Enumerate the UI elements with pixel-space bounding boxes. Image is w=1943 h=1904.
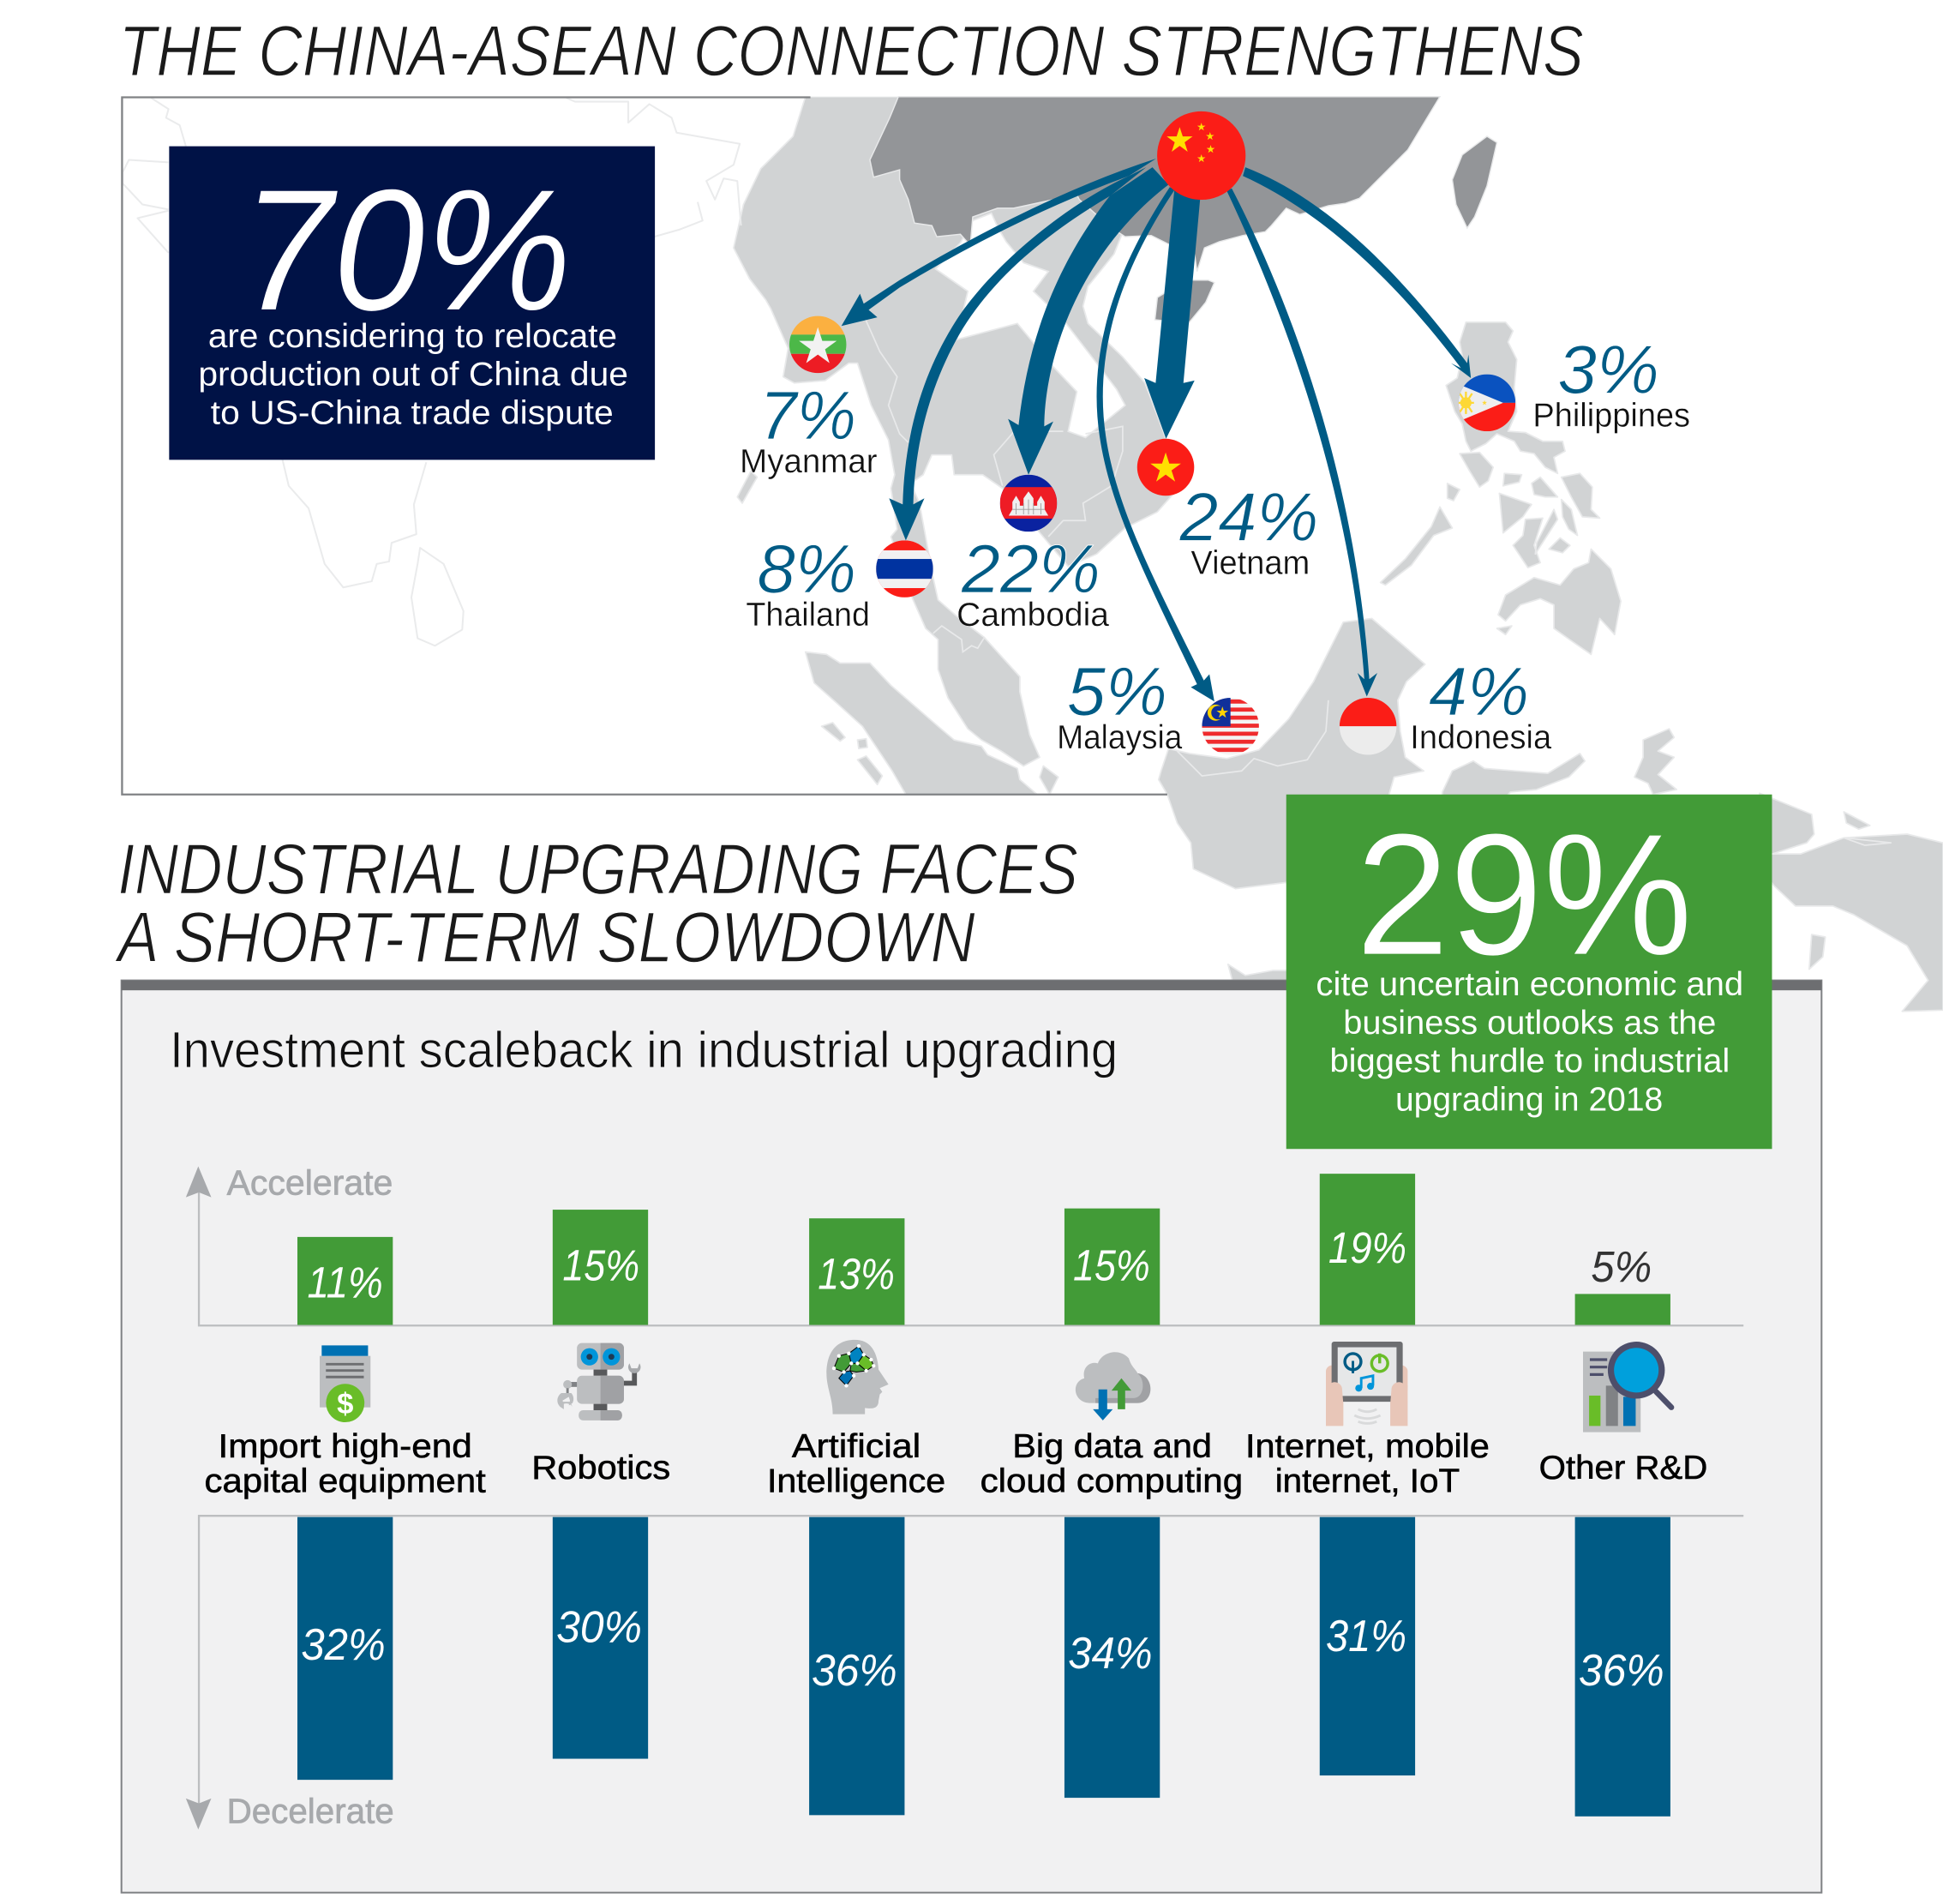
country labels: 5% bbox=[1067, 653, 1167, 730]
bars: decelerate bbox=[297, 1517, 1670, 1817]
heading: industrial upgrading bbox=[114, 828, 1078, 977]
callout: 29 percent: upgrading in 2018 bbox=[1395, 1081, 1663, 1118]
flag: Philippines bbox=[1459, 374, 1515, 432]
country labels: Myanmar bbox=[740, 443, 878, 480]
axis: accelerate bbox=[186, 1163, 1743, 1325]
country labels: Indonesia bbox=[1410, 719, 1551, 756]
bars: accelerate: 13% bbox=[818, 1250, 895, 1299]
category labels: cloud computing bbox=[980, 1463, 1243, 1500]
frame of map panel bbox=[122, 97, 1167, 795]
panel: investment scaleback bbox=[122, 981, 1821, 1893]
country labels: 24% bbox=[1178, 478, 1318, 555]
callout: 70 percent: 70% bbox=[241, 153, 572, 346]
bars: decelerate: 34% bbox=[1068, 1629, 1153, 1679]
country labels: 4% bbox=[1429, 653, 1529, 730]
bars: accelerate: 5% bbox=[1591, 1242, 1652, 1291]
country labels: 3% bbox=[1557, 331, 1659, 407]
bars: accelerate: 11% bbox=[308, 1258, 383, 1307]
arrows from China bbox=[842, 159, 1471, 701]
category labels: Artificial bbox=[792, 1428, 921, 1465]
callout: 70 percent: to US-China trade dispute bbox=[211, 394, 614, 431]
category labels: capital equipment bbox=[205, 1463, 486, 1500]
country labels: 7% bbox=[759, 377, 856, 453]
icon: import equipment: $ bbox=[337, 1388, 353, 1420]
country labels: 22% bbox=[961, 531, 1100, 607]
country labels: Vietnam bbox=[1190, 544, 1310, 581]
country labels: Thailand bbox=[746, 597, 870, 634]
icon: tablet bbox=[1326, 1342, 1407, 1426]
icon: robot bbox=[557, 1343, 640, 1420]
flag: Indonesia bbox=[1340, 698, 1396, 754]
callout: 29 percent: 29% bbox=[1356, 797, 1693, 991]
bars: decelerate: 32% bbox=[301, 1620, 386, 1670]
bars: accelerate bbox=[297, 1174, 1670, 1325]
chart heading: Investment scaleback in industrial upgrading bbox=[170, 1021, 1118, 1078]
callout: 29 percent bbox=[1286, 795, 1772, 1149]
axis: decelerate bbox=[186, 1516, 1743, 1831]
country labels: 8% bbox=[757, 531, 856, 607]
bars: decelerate: 36% bbox=[812, 1646, 897, 1696]
bars: accelerate: 19% bbox=[1328, 1223, 1406, 1272]
bars: decelerate: 30% bbox=[556, 1603, 642, 1653]
flag: Thailand bbox=[876, 540, 933, 598]
axis: accelerate: Accelerate bbox=[227, 1163, 393, 1203]
country labels: Philippines bbox=[1532, 397, 1690, 434]
callout: 70 percent bbox=[169, 147, 655, 459]
bars: accelerate: 15% bbox=[1073, 1240, 1150, 1289]
bars: decelerate: 36% bbox=[1579, 1646, 1664, 1696]
category labels: Internet, mobile bbox=[1245, 1428, 1490, 1465]
flag: Cambodia bbox=[1000, 475, 1057, 532]
category labels bbox=[205, 1428, 1707, 1500]
flag: Malaysia bbox=[1202, 698, 1259, 754]
flag: China bbox=[1157, 111, 1245, 200]
category labels: internet, IoT bbox=[1275, 1463, 1460, 1500]
map of South-East Asia bbox=[123, 97, 1943, 1012]
country labels bbox=[740, 331, 1690, 756]
category labels: Other R&D bbox=[1539, 1450, 1707, 1487]
country labels: Malaysia bbox=[1057, 719, 1183, 756]
callout: 29 percent: cite uncertain economic and bbox=[1316, 966, 1743, 1003]
heading: industrial upgrading: INDUSTRIAL UPGRADING FACES bbox=[117, 828, 1078, 909]
heading: industrial upgrading: A SHORT-TERM SLOWDOWN bbox=[114, 897, 975, 977]
category labels: Import high-end bbox=[218, 1428, 472, 1465]
icon: cloud bbox=[1076, 1352, 1150, 1420]
callout: 29 percent: business outlooks as the bbox=[1343, 1005, 1716, 1042]
axis: decelerate: Decelerate bbox=[227, 1792, 394, 1831]
country labels: Cambodia bbox=[957, 597, 1109, 634]
flag: Vietnam bbox=[1137, 439, 1194, 496]
category labels: Intelligence bbox=[767, 1463, 945, 1500]
icon: AI head bbox=[826, 1340, 889, 1414]
category labels: Robotics bbox=[531, 1450, 670, 1487]
callout: 70 percent: are considering to relocate bbox=[208, 318, 617, 355]
flag: Myanmar bbox=[789, 315, 846, 374]
callout: 29 percent: biggest hurdle to industrial bbox=[1329, 1043, 1730, 1080]
bars: decelerate: 31% bbox=[1326, 1612, 1406, 1661]
category labels: Big data and bbox=[1012, 1428, 1212, 1465]
icon: R&D magnifier bbox=[1583, 1342, 1671, 1433]
bars: accelerate: 15% bbox=[562, 1240, 639, 1289]
icon: import equipment bbox=[320, 1345, 370, 1422]
title: China-ASEAN connection: THE CHINA-ASEAN CONNECTION STRENGTHENS bbox=[119, 10, 1584, 91]
callout: 70 percent: production out of China due bbox=[198, 357, 628, 393]
